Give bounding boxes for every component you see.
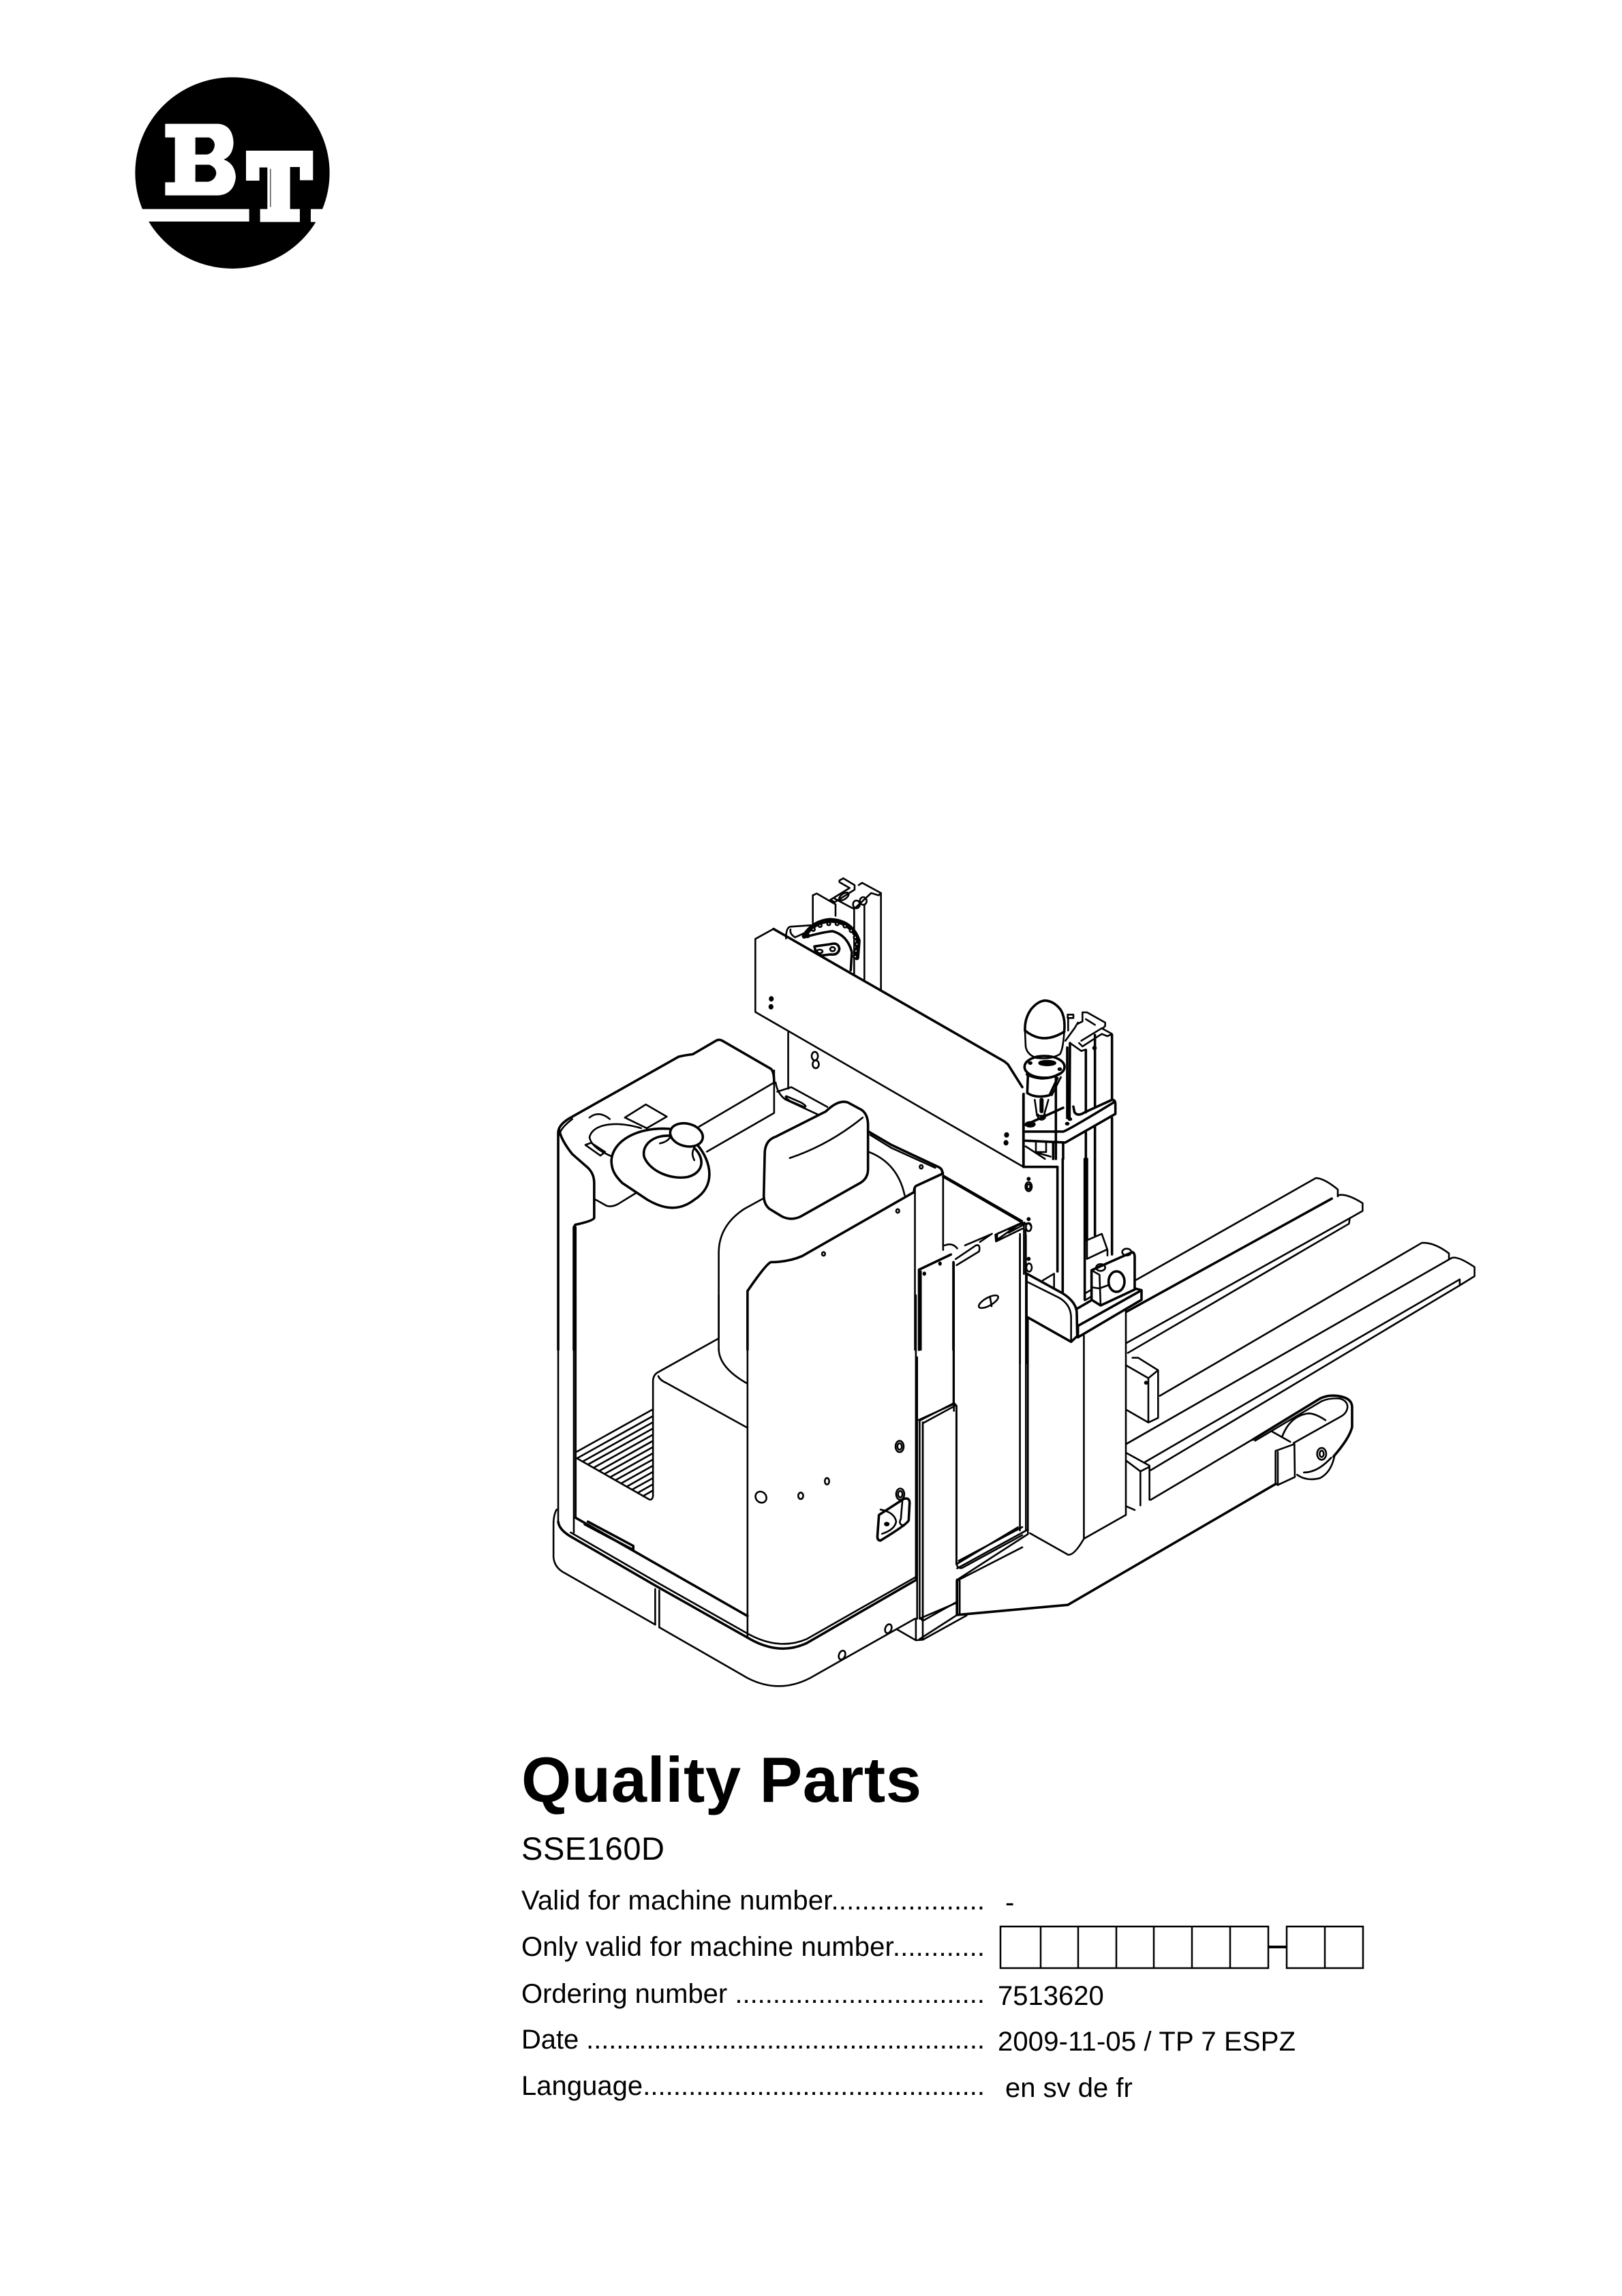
panel screws [769, 997, 1008, 1145]
support arm [1253, 1395, 1352, 1457]
seat back and side panel [719, 1131, 1022, 1350]
carriage plate [1077, 1288, 1142, 1338]
cross panel [774, 929, 1022, 1087]
side screws [754, 1441, 904, 1504]
body block [919, 1310, 1126, 1639]
model: SSE160D [521, 1830, 664, 1867]
lower mast, clamp and carriage [1009, 1159, 1142, 1363]
console [558, 1040, 774, 1350]
beacon lamp [1024, 1001, 1065, 1119]
info values: 7513620 [998, 1981, 1104, 2011]
rail top [1065, 1012, 1112, 1051]
info values [998, 1888, 1296, 2103]
panel and rails [1024, 1159, 1112, 1300]
joystick [590, 1120, 709, 1208]
info labels: Date ..................................................... [521, 2025, 985, 2055]
rear deck [776, 1083, 827, 1115]
headrest [764, 1102, 868, 1219]
info values: - [1005, 1888, 1014, 1918]
illustration: pallet truck [553, 878, 1475, 1686]
front mast and beacon [1005, 1001, 1116, 1159]
mast rails [1053, 1035, 1112, 1159]
fork block and support wheel [1127, 1358, 1352, 1510]
clamp [1092, 1249, 1135, 1305]
door [917, 1224, 1028, 1618]
panel screws [1026, 1178, 1032, 1271]
rear mast and chain [786, 878, 881, 991]
forks [1127, 1178, 1475, 1500]
info values: en sv de fr [1005, 2073, 1133, 2103]
small screws and nut [1005, 1046, 1096, 1159]
logo: BT [132, 77, 336, 269]
info labels: Only valid for machine number............ [521, 1932, 985, 1962]
bolts [838, 891, 867, 908]
wheel [1145, 1382, 1334, 1479]
bracket [1276, 1444, 1295, 1485]
rear rails [813, 893, 881, 991]
chain wheel [786, 925, 852, 970]
panel end [943, 1093, 1024, 1274]
rail top plates [813, 878, 881, 909]
machine number boxes [1000, 1927, 1363, 1968]
step [575, 1517, 748, 1616]
truck lower body [553, 1295, 1022, 1686]
info labels: Ordering number ................................. [521, 1979, 985, 2009]
chain [804, 920, 859, 958]
crossbar [1026, 1100, 1116, 1143]
info labels: Language............................................. [521, 2071, 985, 2101]
info labels [521, 1886, 985, 2101]
truck cab [558, 929, 1022, 1350]
bumper [553, 1509, 917, 1686]
truck front: door, leg, forks [917, 1093, 1475, 1639]
latch [877, 1498, 910, 1541]
seat box [577, 1338, 748, 1500]
rounded corner [1009, 1222, 1077, 1363]
lower panel [897, 1295, 1022, 1640]
fork block [1127, 1358, 1158, 1510]
block [1086, 1234, 1107, 1300]
leg base [957, 1484, 1276, 1615]
info values: 2009-11-05 / TP 7 ESPZ [998, 2027, 1296, 2057]
title: Quality Parts [521, 1744, 921, 1815]
info labels: Valid for machine number.................... [521, 1886, 985, 1916]
cab uprights [558, 1295, 916, 1637]
floor hatch [577, 1410, 652, 1496]
rear door top [919, 1222, 1022, 1350]
cross panel edges [755, 929, 1022, 1166]
panel tip [1022, 1094, 1024, 1159]
